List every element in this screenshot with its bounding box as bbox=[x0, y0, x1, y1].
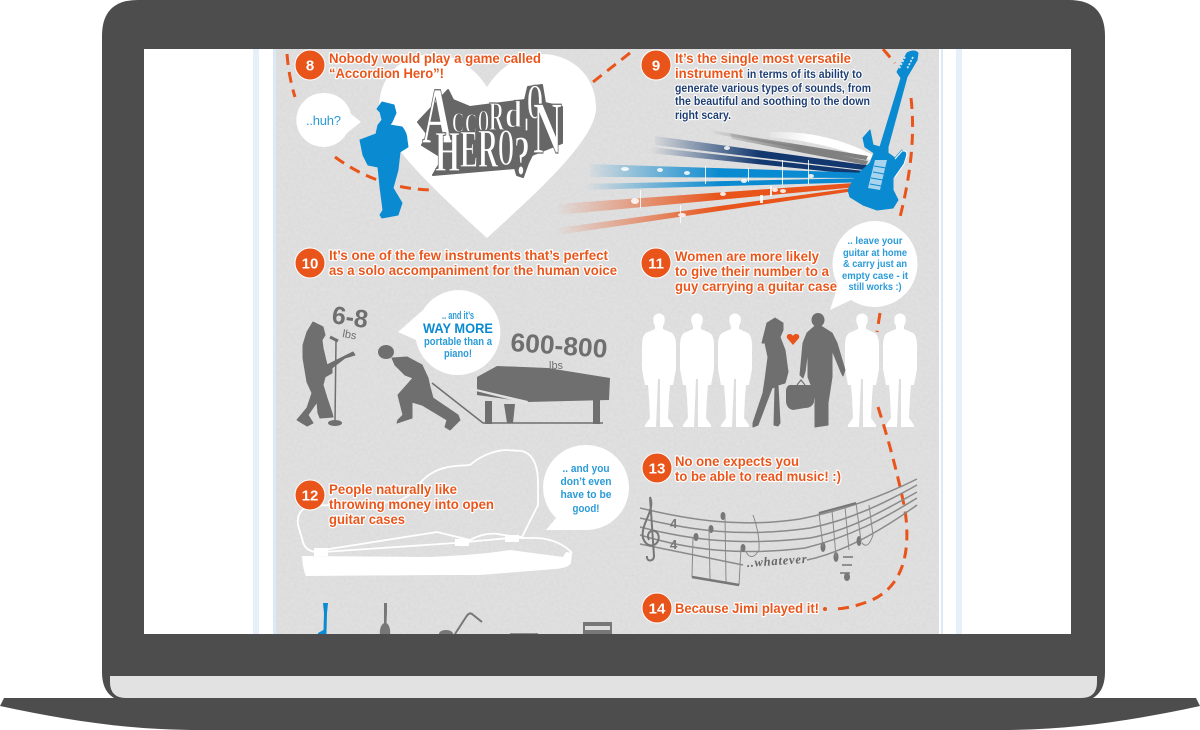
speech bubble huh bbox=[296, 93, 361, 147]
accordion hero logo: E bbox=[460, 119, 478, 179]
amplifier icon bbox=[583, 622, 612, 636]
speech bubble way more portable: piano! bbox=[444, 348, 472, 360]
heading 10: as a solo accompaniment for the human voice bbox=[329, 263, 617, 278]
heading 10 bbox=[329, 248, 617, 278]
accordion hero logo: C bbox=[465, 109, 477, 140]
speech bubble way more portable bbox=[398, 290, 500, 375]
man with guitar case silhouette bbox=[786, 313, 845, 427]
accordion hero logo: C bbox=[452, 107, 464, 139]
item 10: solo accompaniment bbox=[295, 248, 617, 430]
time signature bbox=[670, 516, 678, 552]
laptop stand base bbox=[0, 698, 1200, 730]
grey guitar icon bbox=[380, 603, 390, 636]
page background bands bbox=[253, 49, 962, 634]
accordion hero logo: A bbox=[422, 73, 453, 161]
heading 14: Because Jimi played it! bbox=[675, 601, 819, 616]
accordion hero logo: O bbox=[498, 119, 514, 177]
heading 8: Nobody would play a game called bbox=[329, 51, 541, 66]
sound beams bbox=[557, 130, 873, 235]
speech bubble you don't have to be good: .. and you bbox=[562, 463, 610, 475]
speech bubble you don't have to be good: have to be bbox=[560, 489, 612, 501]
heading 10: It’s one of the few instruments that’s perfect bbox=[329, 248, 608, 263]
heading 11: guy carrying a guitar case bbox=[675, 279, 837, 294]
speech bubble leave your guitar: & carry just an bbox=[843, 258, 907, 270]
speech bubble leave your guitar: empty case - it bbox=[842, 270, 908, 282]
heading 8 bbox=[329, 51, 541, 81]
heart bbox=[379, 54, 596, 238]
heading 9: instrument bbox=[675, 66, 743, 81]
accordion hero logo: ? bbox=[514, 125, 530, 187]
grand piano bbox=[468, 366, 610, 424]
heading 11 bbox=[675, 249, 837, 294]
white men silhouettes bbox=[642, 314, 917, 427]
heading 11: Women are more likely bbox=[675, 249, 819, 264]
number badge 14: 14 bbox=[649, 600, 666, 618]
dashed connector path bbox=[287, 49, 913, 610]
heading 13 bbox=[675, 454, 841, 484]
item 13: reading music bbox=[640, 453, 917, 585]
whatever label: ..whatever bbox=[746, 552, 807, 570]
speech bubble leave your guitar: still works :) bbox=[848, 281, 902, 293]
paper texture panel bbox=[276, 49, 939, 634]
box icon bbox=[510, 633, 538, 635]
speech bubble leave your guitar bbox=[830, 221, 917, 310]
speech bubble you don't have to be good: good! bbox=[572, 503, 600, 515]
woman silhouette bbox=[753, 318, 788, 427]
electric guitar bbox=[848, 51, 918, 210]
item 8: accordion hero bbox=[295, 50, 596, 238]
speech bubble way more portable: WAY MORE bbox=[423, 320, 493, 336]
number badge 12 bbox=[295, 480, 325, 510]
speech bubble leave your guitar: .. leave your bbox=[848, 235, 902, 247]
saxophone icon bbox=[439, 613, 482, 638]
weight label 600-800 lbs: lbs bbox=[549, 360, 564, 372]
guitar case outline bbox=[298, 450, 572, 576]
item 11: women and guitar cases bbox=[641, 221, 917, 427]
small heart bbox=[787, 334, 799, 345]
speech bubble way more portable: .. and it’s bbox=[442, 310, 474, 322]
number badge 9 bbox=[641, 50, 671, 80]
number badge 13 bbox=[642, 453, 672, 483]
blue bass icon bbox=[318, 603, 328, 640]
item 14: because jimi bbox=[642, 593, 819, 623]
heading 12: People naturally like bbox=[329, 482, 457, 497]
guitarist silhouette with mic bbox=[297, 322, 355, 426]
man dragging piano bbox=[378, 345, 603, 430]
accordion hero logo: H bbox=[435, 119, 460, 184]
heading 13: No one expects you bbox=[675, 454, 799, 469]
item 12: open guitar case bbox=[295, 445, 629, 576]
weight label 6-8 lbs bbox=[332, 306, 368, 340]
number badge 10 bbox=[295, 248, 325, 278]
accordion hero logo: O bbox=[527, 73, 543, 129]
heading 9: right scary. bbox=[675, 110, 731, 122]
number badge 13: 13 bbox=[649, 460, 665, 478]
number badge 8: 8 bbox=[306, 58, 314, 74]
weight label 6-8 lbs: 6-8 bbox=[330, 301, 370, 334]
number badge 12: 12 bbox=[302, 488, 318, 504]
number badge 9: 9 bbox=[652, 58, 660, 74]
speech bubble you don't have to be good: don’t even bbox=[560, 476, 612, 488]
accordion hero logo: d bbox=[505, 94, 522, 136]
bottom instruments row bbox=[318, 603, 612, 640]
weight label 6-8 lbs: lbs bbox=[341, 328, 358, 342]
treble clef bbox=[643, 497, 659, 560]
white music notes on beams bbox=[621, 146, 814, 223]
item 9: versatile guitar bbox=[557, 50, 918, 235]
accordion player silhouette bbox=[360, 102, 408, 218]
heading 9: generate various types of sounds, from bbox=[675, 83, 871, 95]
number badge 8 bbox=[295, 50, 325, 80]
laptop lower lip bbox=[110, 676, 1097, 698]
time signature: 4 bbox=[670, 516, 678, 531]
number badge 10: 10 bbox=[302, 256, 318, 272]
heading 13: to be able to read music! :) bbox=[675, 469, 841, 484]
accordion hero logo: R bbox=[489, 93, 504, 139]
number badge 11 bbox=[641, 248, 671, 278]
heading 9: in terms of its ability to bbox=[747, 69, 862, 81]
accordion hero logo: R bbox=[478, 118, 498, 180]
heading 9 bbox=[675, 51, 871, 122]
number badge 11: 11 bbox=[648, 256, 664, 272]
music staff bbox=[640, 479, 917, 585]
speech bubble huh: ..huh? bbox=[306, 113, 341, 128]
heading 9: It’s the single most versatile bbox=[675, 51, 851, 66]
heading 9: the beautiful and soothing to the down bbox=[675, 96, 870, 108]
accordion hero logo: O bbox=[478, 104, 489, 140]
notes left group bbox=[692, 512, 759, 585]
notes right group bbox=[819, 503, 873, 581]
laptop screen bbox=[144, 49, 1071, 640]
accordion hero logo: I bbox=[523, 114, 530, 136]
heading 8: “Accordion Hero”! bbox=[329, 66, 444, 81]
heading 12: throwing money into open bbox=[329, 497, 494, 512]
speech bubble leave your guitar: guitar at home bbox=[843, 247, 907, 259]
number badge 14 bbox=[642, 593, 672, 623]
speech bubble you don't have to be good bbox=[543, 445, 629, 530]
weight label 600-800 lbs: 600-800 bbox=[510, 327, 608, 364]
time signature: 4 bbox=[670, 537, 678, 552]
heading 11: to give their number to a bbox=[675, 264, 829, 279]
speech bubble way more portable: portable than a bbox=[424, 336, 493, 348]
heading 12: guitar cases bbox=[329, 512, 405, 527]
accordion hero logo: N bbox=[533, 88, 562, 170]
accordion hero logo bbox=[417, 84, 563, 178]
heading 12 bbox=[329, 482, 494, 527]
